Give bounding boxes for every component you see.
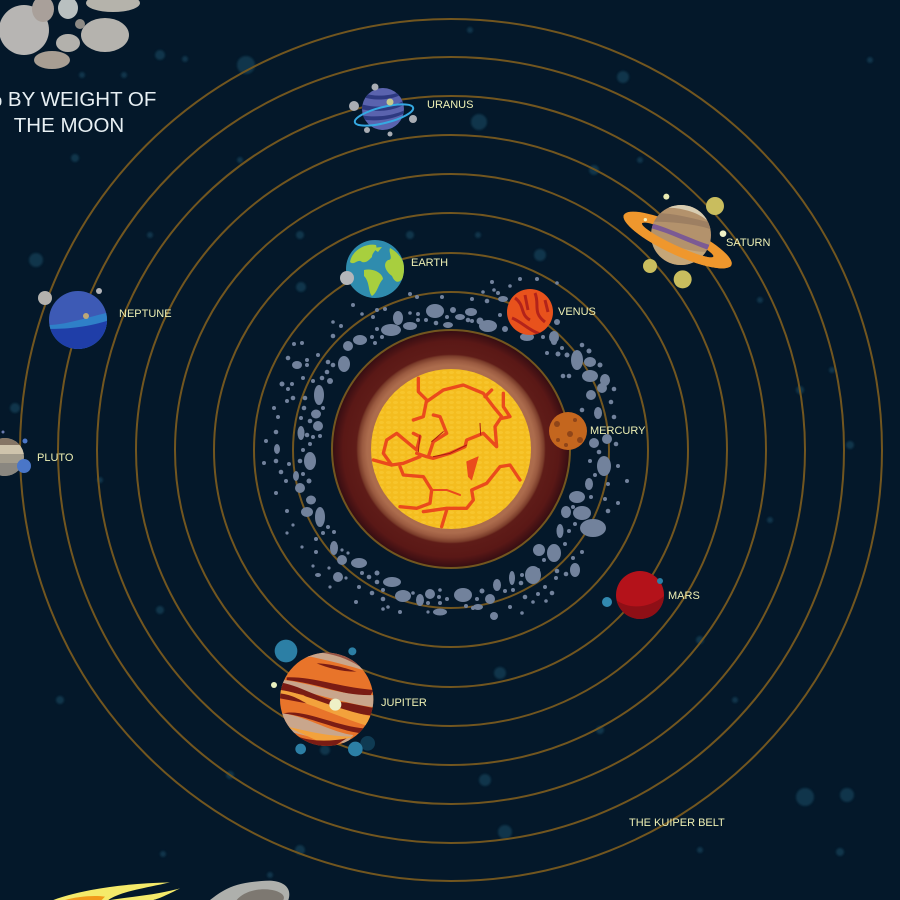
label: Mercury: MERCURY: [590, 425, 646, 437]
planet: Venus: [507, 289, 553, 335]
sun halo: [332, 330, 570, 568]
label: Venus: VENUS: [558, 306, 596, 318]
asteroid bottom: [210, 881, 289, 900]
label: Saturn: SATURN: [726, 237, 770, 249]
comet: [53, 882, 180, 900]
label: Mars: MARS: [668, 590, 700, 602]
planet: Neptune: [38, 288, 110, 350]
label: Neptune: NEPTUNE: [119, 308, 172, 320]
planet: Uranus: [349, 84, 417, 136]
planet: Pluto: [0, 430, 31, 477]
planet: Jupiter: [271, 640, 375, 756]
label: Uranus: URANUS: [427, 99, 473, 111]
moon rocks top-left: [0, 0, 140, 69]
title text line two: THE MOON: [14, 114, 124, 137]
sun surface cracks: [373, 378, 520, 527]
sun: [371, 369, 531, 529]
planet: Mercury: [549, 412, 587, 450]
label: Pluto: PLUTO: [37, 452, 74, 464]
label: Jupiter: JUPITER: [381, 697, 427, 709]
label: Earth: EARTH: [411, 257, 448, 269]
planet: Earth: [340, 240, 405, 298]
planet: Mars: [602, 571, 664, 620]
asteroid belt: [262, 277, 629, 620]
label: The Kuiper Belt: THE KUIPER BELT: [629, 817, 725, 829]
planet: Saturn: [618, 194, 738, 288]
